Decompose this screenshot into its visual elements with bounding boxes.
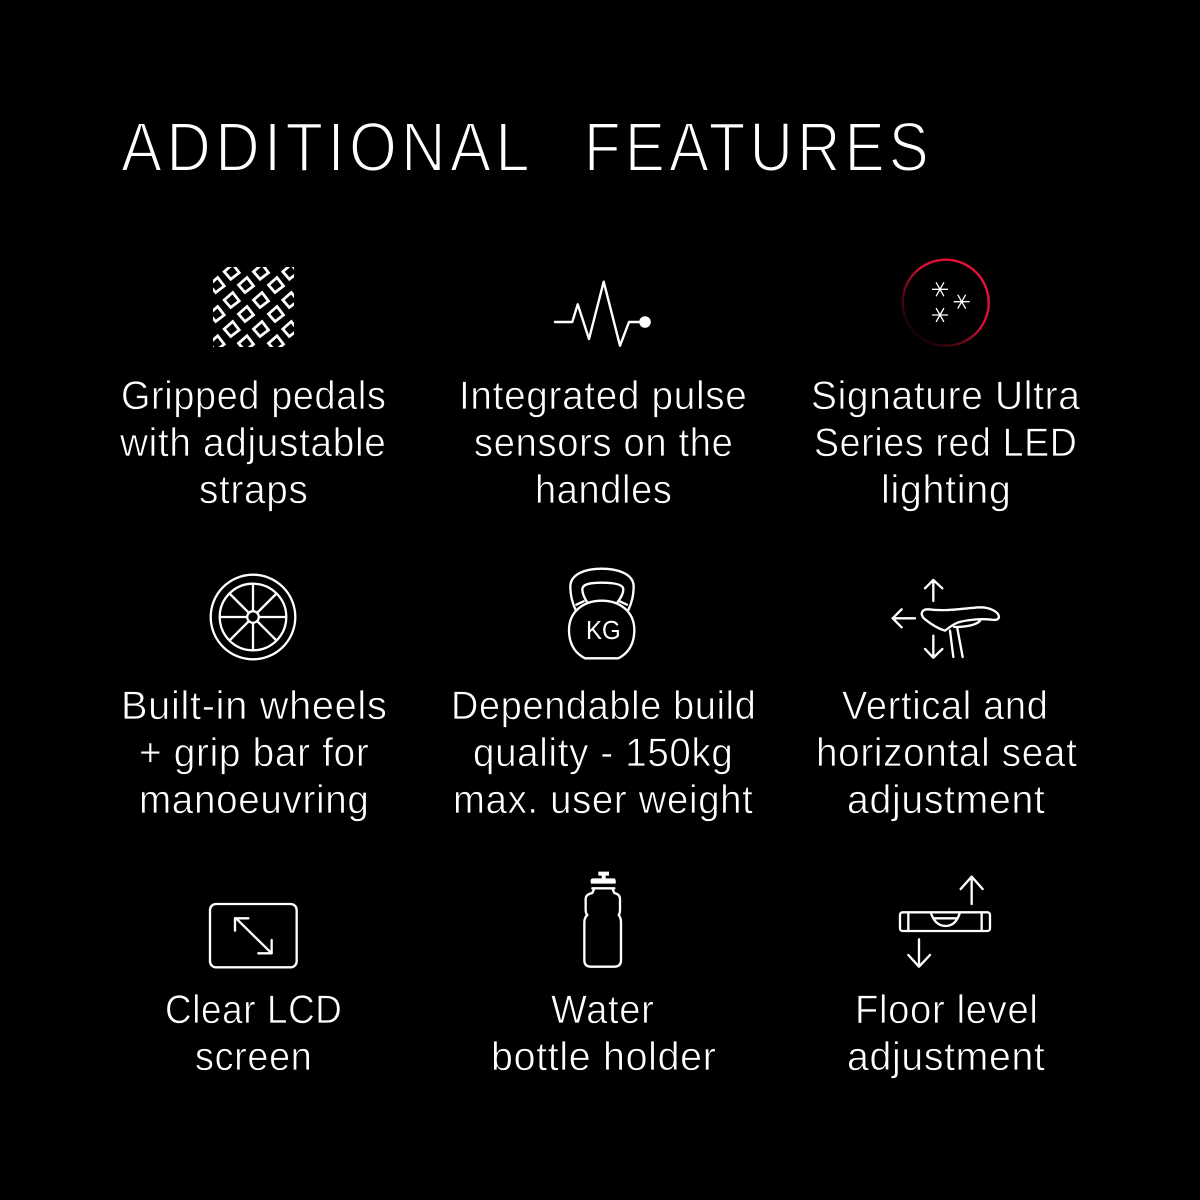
label: seat adjustment: Vertical and: [842, 684, 1048, 728]
panel: seat adjustment: [816, 580, 1078, 822]
label: gripped pedals: straps: [199, 468, 308, 512]
title: [121, 108, 933, 186]
label: seat adjustment: adjustment: [847, 778, 1046, 822]
label: pulse sensors: sensors on the: [474, 421, 734, 465]
panel: LCD screen: [165, 904, 342, 1079]
panel: water bottle: [491, 872, 716, 1079]
icon: red LED ring with stars: [903, 260, 989, 346]
icon: grip pattern: [213, 267, 294, 347]
label: gripped pedals: Gripped pedals: [121, 374, 386, 418]
panel: build quality: [451, 569, 756, 822]
title: ADDITIONAL: [121, 108, 534, 186]
label: pulse sensors: handles: [535, 468, 672, 512]
label: red LED lighting: lighting: [881, 468, 1012, 512]
panel: red LED lighting: [811, 260, 1080, 512]
label: built-in wheels: [121, 684, 388, 822]
label: built-in wheels: manoeuvring: [139, 778, 370, 822]
icon: kettlebell: [569, 569, 634, 658]
title: FEATURES: [584, 108, 933, 186]
icon: saddle with arrows: [893, 580, 999, 658]
label: build quality: [451, 684, 756, 822]
label: water bottle: [491, 988, 716, 1079]
label: red LED lighting: Series red LED: [814, 421, 1078, 465]
label: seat adjustment: horizontal seat: [816, 731, 1078, 775]
icon: wheel: [211, 575, 295, 659]
label: LCD screen: Clear LCD: [165, 988, 342, 1032]
label: built-in wheels: + grip bar for: [139, 731, 370, 775]
icon: water bottle: [584, 872, 621, 967]
label: build quality: max. user weight: [453, 778, 754, 822]
icon: LCD screen: [210, 904, 297, 967]
label: seat adjustment: [816, 684, 1078, 822]
panel: gripped pedals: [119, 264, 387, 512]
label: gripped pedals: with adjustable: [119, 421, 387, 465]
label: LCD screen: screen: [195, 1035, 312, 1079]
label: built-in wheels: Built-in wheels: [121, 684, 388, 728]
label: pulse sensors: Integrated pulse: [459, 374, 748, 418]
label: floor level: adjustment: [847, 1035, 1046, 1079]
panel: floor level: [847, 877, 1046, 1079]
label: LCD screen: [165, 988, 342, 1079]
label: red LED lighting: Signature Ultra: [811, 374, 1080, 418]
label: pulse sensors: [459, 374, 748, 512]
label: build quality: quality - 150kg: [473, 731, 734, 775]
label: floor level: [847, 988, 1046, 1079]
label: gripped pedals: [119, 374, 387, 512]
icon: kettlebell: KG: [586, 615, 621, 645]
panel: built-in wheels: [121, 575, 388, 822]
label: water bottle: bottle holder: [491, 1035, 716, 1079]
label: build quality: Dependable build: [451, 684, 756, 728]
label: floor level: Floor level: [855, 988, 1038, 1032]
panel: pulse sensors: [459, 282, 748, 512]
icon: spirit level with arrows: [900, 877, 990, 967]
label: water bottle: Water: [551, 988, 654, 1032]
label: red LED lighting: [811, 374, 1080, 512]
icon: pulse line: [555, 282, 651, 346]
